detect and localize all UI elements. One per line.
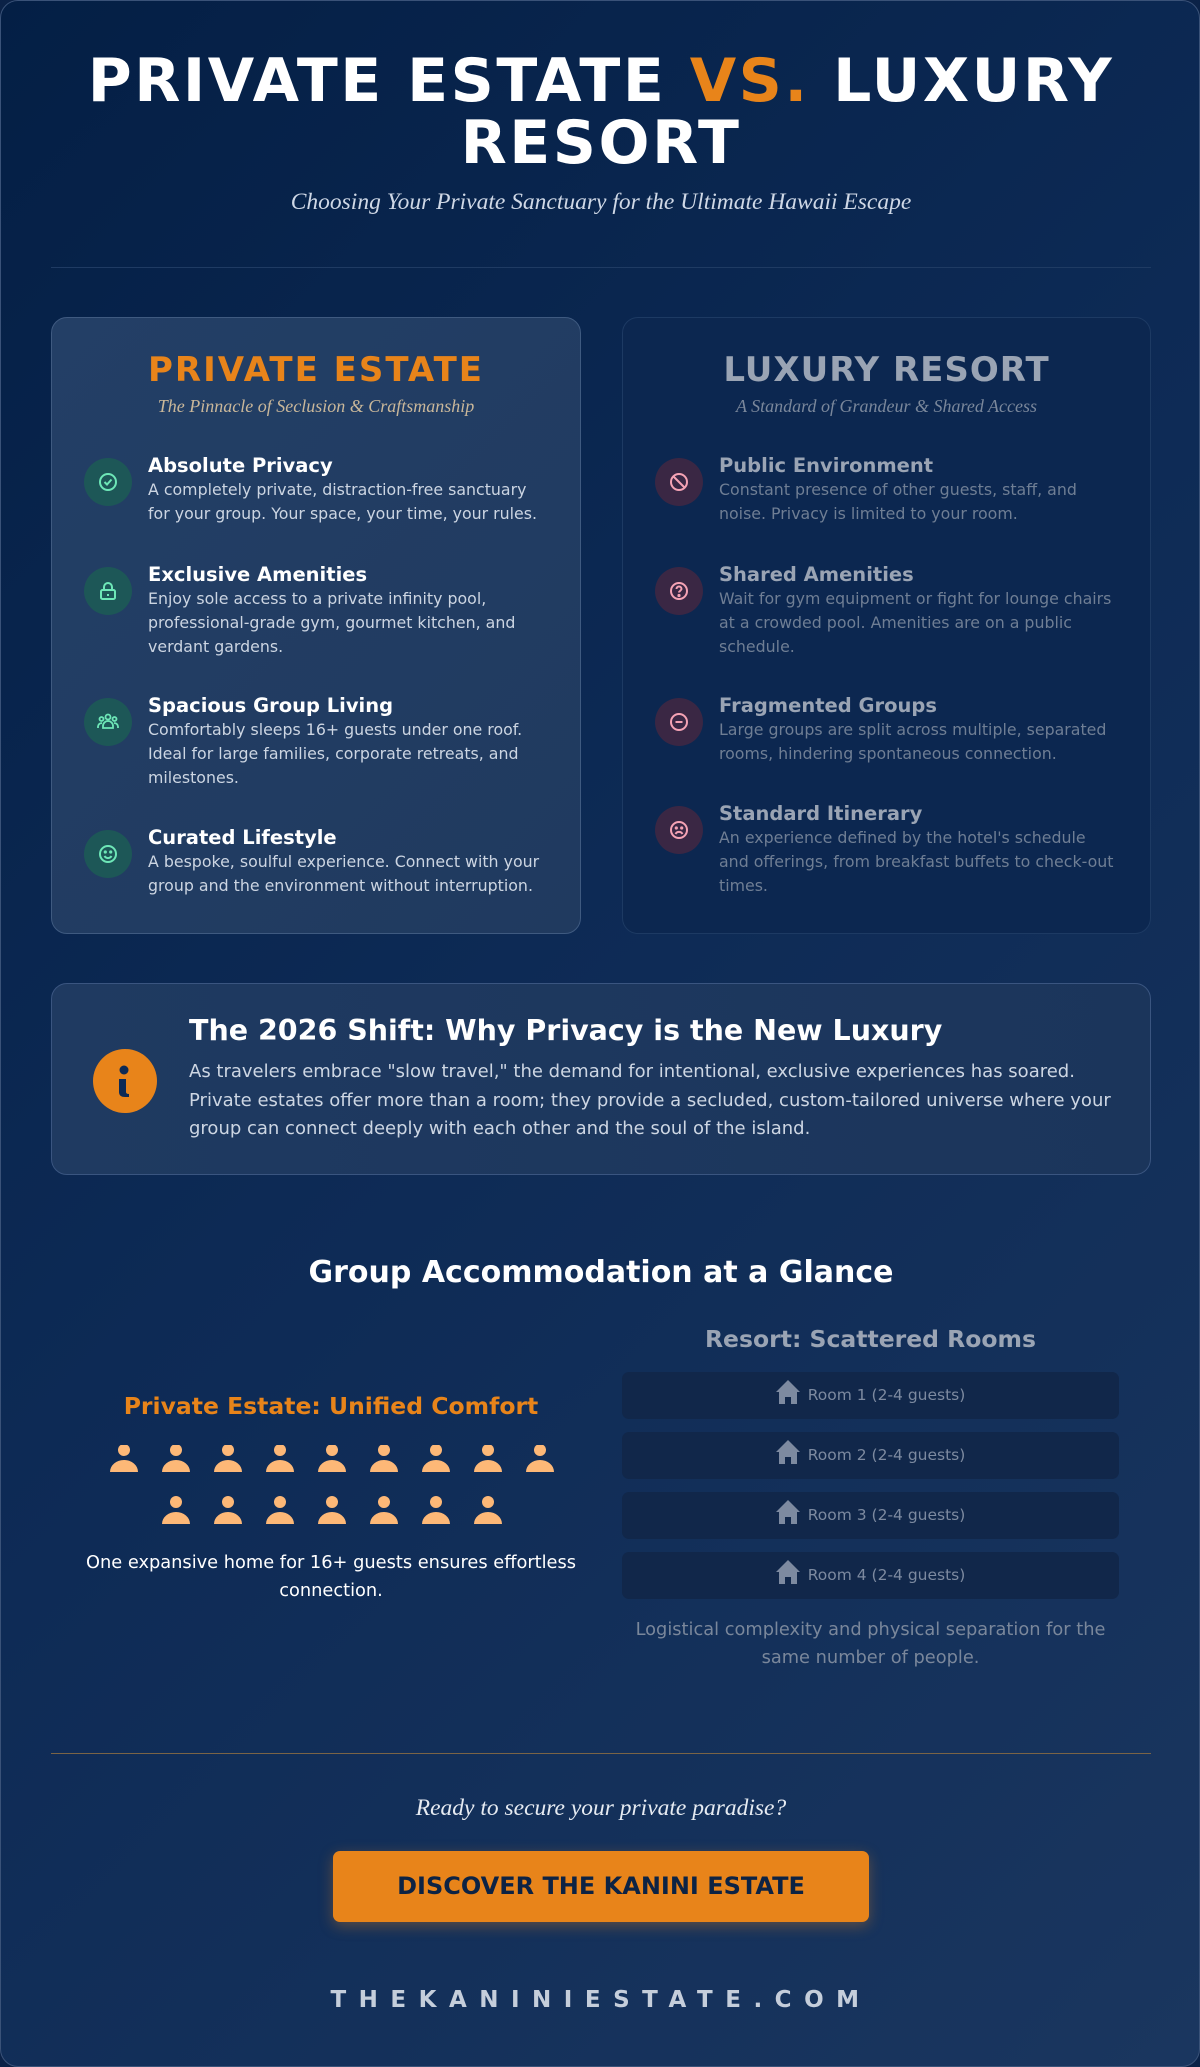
room 2 [622, 1432, 1119, 1479]
panel: private estate: A completely private, distraction-free sanctuary for your group. Your space, your time, your rules. [148, 480, 537, 523]
heading: group accommodation: Group Accommodation at a Glance [309, 1255, 893, 1290]
room 4 [622, 1552, 1119, 1599]
callout: 2026 shift [51, 983, 1151, 1175]
item: exclusive amenities [84, 563, 515, 656]
icon grid: people [110, 1445, 554, 1524]
button: discover: DISCOVER THE KANINI ESTATE [397, 1872, 805, 1900]
panel: private estate: Absolute Privacy [148, 454, 333, 477]
panel: luxury resort: Fragmented Groups [719, 694, 937, 717]
panel: private estate unified [86, 1392, 576, 1601]
subheading: unified comfort: Private Estate: Unified Comfort [124, 1392, 538, 1420]
caption: One expansive home for 16+ guests ensures effortless connection. [86, 1552, 576, 1601]
item: standard itinerary [655, 802, 1114, 895]
title: RESORT [461, 108, 741, 178]
panel: private estate: Spacious Group Living [148, 694, 393, 717]
panel: private estate: Enjoy sole access to a private infinity pool, professional-grade gym, gourmet kitchen, and verdant gardens. [148, 589, 515, 656]
cta prompt: Ready to secure your private paradise? [416, 1795, 786, 1821]
item: absolute privacy [84, 454, 537, 523]
title: PRIVATE ESTATE VS. LUXURY [88, 46, 1114, 116]
item: fragmented groups [655, 694, 1106, 763]
icon: info [93, 1049, 157, 1113]
panel: luxury resort: Wait for gym equipment or fight for lounge chairs at a crowded pool. Amenities are on a public schedule. [719, 589, 1111, 656]
panel: luxury resort [622, 317, 1151, 934]
subtitle: Choosing Your Private Sanctuary for the Ultimate Hawaii Escape [291, 189, 911, 215]
item: curated lifestyle [84, 826, 540, 895]
caption: resort: Logistical complexity and physical separation for the same number of people. [636, 1619, 1105, 1668]
footer url: THEKANINIESTATE.COM [330, 1987, 872, 2013]
subheading: The Pinnacle of Seclusion & Craftsmanship [158, 396, 474, 416]
heading: private estate: PRIVATE ESTATE [148, 350, 484, 390]
panel: private estate: Curated Lifestyle [148, 826, 337, 849]
subheading: scattered rooms: Resort: Scattered Rooms [705, 1325, 1036, 1353]
panel: luxury resort: Constant presence of other guests, staff, and noise. Privacy is limited to your room. [719, 480, 1077, 523]
room 3 [622, 1492, 1119, 1539]
heading: luxury resort: LUXURY RESORT [723, 350, 1050, 390]
panel: private estate: Exclusive Amenities [148, 563, 367, 586]
panel: private estate: A bespoke, soulful experience. Connect with your group and the environment without interruption. [148, 852, 539, 895]
room 1: Room 1 (2-4 guests) [808, 1386, 965, 1404]
panel: private estate: Comfortably sleeps 16+ guests under one roof. Ideal for large families, corporate retreats, and milestones. [148, 720, 522, 787]
item: shared amenities [655, 563, 1111, 656]
item: public environment [655, 454, 1077, 523]
panel: luxury resort: Public Environment [719, 454, 933, 477]
callout heading: The 2026 Shift: Why Privacy is the New Luxury [189, 1014, 942, 1047]
item: spacious group living [84, 694, 522, 787]
panel: luxury resort: Standard Itinerary [719, 802, 922, 825]
callout text: As travelers embrace "slow travel," the demand for intentional, exclusive experiences has soared. Private estates offer more than a room; they provide a secluded, custom-tailored universe where your group can connect deeply with each other and the soul of the island. [189, 1061, 1111, 1139]
room 1 [622, 1372, 1119, 1419]
button: discover [333, 1851, 869, 1922]
panel: luxury resort: Large groups are split across multiple, separated rooms, hindering spontaneous connection. [719, 720, 1106, 763]
panel: luxury resort: An experience defined by the hotel's schedule and offerings, from breakfast buffets to check-out times. [719, 828, 1113, 895]
subheading: A Standard of Grandeur & Shared Access [736, 396, 1037, 416]
room 4: Room 4 (2-4 guests) [808, 1566, 965, 1584]
room 3: Room 3 (2-4 guests) [808, 1506, 965, 1524]
panel: luxury resort: Shared Amenities [719, 563, 914, 586]
panel: private estate [51, 317, 581, 934]
title [88, 46, 1114, 178]
room 2: Room 2 (2-4 guests) [808, 1446, 965, 1464]
